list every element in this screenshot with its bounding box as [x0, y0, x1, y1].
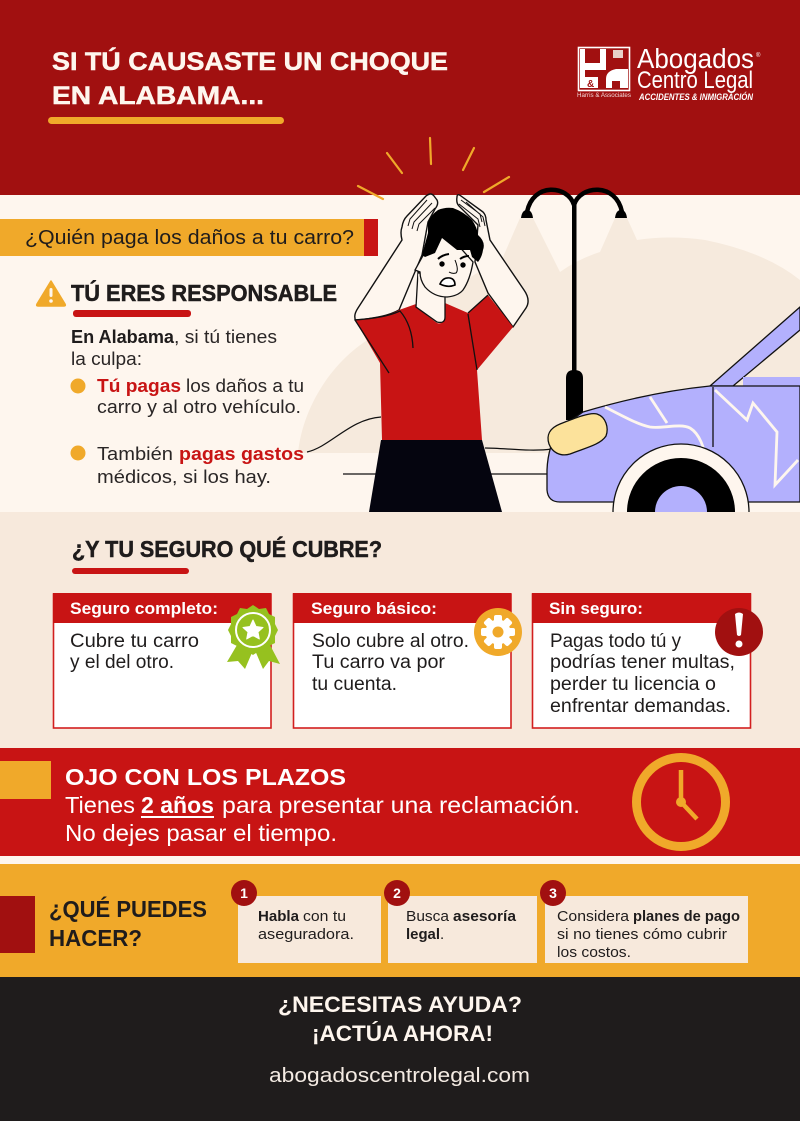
icon: gear	[474, 608, 522, 656]
deadline text: 2 años	[141, 792, 214, 818]
bullet one: los daños a tu	[186, 376, 304, 396]
responsibility text: En Alabama	[71, 327, 175, 347]
pants	[369, 440, 502, 512]
card: sin seguro: Pagas todo tú y	[550, 631, 681, 652]
step two: 2	[393, 885, 401, 901]
deadline text: No dejes pasar el tiempo.	[65, 820, 337, 846]
responsibility text: , si tú tienes	[174, 327, 277, 347]
step three: 3	[549, 885, 557, 901]
title: SI TÚ CAUSASTE UN CHOQUE	[52, 46, 448, 76]
head	[415, 225, 473, 297]
card: sin seguro: perder tu licencia o	[550, 674, 716, 695]
card: seguro completo: Cubre tu carro	[70, 631, 199, 652]
headlight	[548, 414, 607, 455]
ground line and wires	[307, 417, 552, 474]
call to action: ¿NECESITAS AYUDA?	[278, 992, 522, 1017]
bullet two: pagas gastos	[179, 444, 304, 464]
card: seguro basico	[293, 593, 511, 728]
left arm and hand	[355, 194, 438, 320]
car	[547, 307, 800, 580]
step three: los costos.	[557, 944, 631, 961]
heading underline	[73, 310, 191, 317]
step three	[540, 880, 748, 963]
bullet two	[70, 444, 304, 487]
footer	[0, 977, 800, 1121]
icon: warning	[37, 281, 65, 306]
logo mark	[577, 48, 632, 99]
finger lines	[408, 200, 485, 231]
wheel	[613, 444, 749, 580]
question bar	[0, 219, 378, 256]
right arm and hand	[457, 195, 528, 327]
street lamp	[521, 190, 627, 420]
neck	[416, 272, 445, 322]
card: seguro basico: Tu carro va por	[312, 652, 446, 673]
step three: planes de pago	[633, 908, 740, 925]
header band	[0, 0, 800, 195]
title: EN ALABAMA...	[52, 82, 264, 110]
icon: exclamation	[715, 608, 763, 656]
logo: ACCIDENTES & INMIGRACIÓN	[638, 91, 753, 102]
step two: Busca	[406, 908, 450, 925]
bullet one	[70, 376, 304, 417]
bullet two: médicos, si los hay.	[97, 467, 271, 487]
shirt lines	[355, 295, 488, 373]
shirt	[355, 295, 513, 440]
deadline text: para presentar una reclamación.	[222, 792, 580, 818]
logo mark: &	[587, 79, 594, 90]
card: seguro basico: Solo cubre al otro.	[312, 631, 469, 652]
actions heading: HACER?	[49, 925, 142, 951]
background hump and lamp light	[298, 218, 800, 453]
actions band	[0, 856, 800, 977]
bullet two: También	[97, 444, 173, 464]
card: seguro completo: Seguro completo:	[70, 599, 218, 618]
impact rays	[358, 138, 509, 199]
deadline heading: OJO CON LOS PLAZOS	[65, 764, 346, 790]
question bar: ¿Quién paga los daños a tu carro?	[25, 227, 354, 249]
step three: si no tienes cómo cubrir	[557, 926, 727, 943]
step one: aseguradora.	[258, 926, 354, 943]
logo: Centro Legal	[637, 67, 753, 94]
icon: clock	[636, 758, 726, 846]
deadline text: Tienes	[65, 792, 135, 818]
card: sin seguro	[532, 593, 751, 728]
responsibility text	[70, 327, 304, 487]
title	[52, 46, 448, 110]
bullet one: Tú pagas	[97, 376, 181, 396]
step one: 1	[240, 885, 248, 901]
card: seguro completo	[53, 593, 271, 728]
title underline	[48, 117, 284, 124]
call to action: ¡ACTÚA AHORA!	[312, 1021, 493, 1046]
hair	[422, 208, 484, 262]
underline two years	[141, 816, 214, 818]
logo: ®	[756, 52, 761, 59]
actions heading	[49, 895, 207, 951]
logo mark: Harris & Associates	[577, 92, 632, 99]
insurance section	[0, 512, 800, 748]
bullet one: carro y al otro vehículo.	[97, 397, 301, 417]
step two	[384, 880, 537, 963]
card: seguro basico: tu cuenta.	[312, 674, 397, 695]
call to action	[278, 992, 522, 1046]
illustration: man and crashed car	[298, 190, 800, 580]
website: abogadoscentrolegal.com	[269, 1065, 530, 1087]
icon: ribbon	[227, 605, 280, 669]
step two: legal	[406, 926, 440, 943]
card: sin seguro: podrías tener multas,	[550, 652, 735, 673]
logo	[577, 43, 761, 102]
heading: seguro: ¿Y TU SEGURO QUÉ CUBRE?	[72, 535, 382, 562]
man	[355, 194, 528, 512]
card: seguro basico: Seguro básico:	[311, 599, 437, 618]
actions heading: ¿QUÉ PUEDES	[49, 895, 207, 922]
deadline band	[0, 748, 800, 856]
card: sin seguro: enfrentar demandas.	[550, 696, 731, 717]
deadline text	[65, 792, 580, 846]
underline	[72, 568, 189, 574]
face features	[438, 254, 469, 286]
step one: Habla	[258, 908, 300, 925]
card: seguro completo: y el del otro.	[70, 652, 174, 673]
responsibility text: la culpa:	[71, 349, 142, 369]
step two: asesoría	[453, 908, 517, 925]
step three: Considera	[557, 908, 630, 925]
step two: .	[440, 926, 444, 943]
step one	[231, 880, 381, 963]
card: sin seguro: Sin seguro:	[549, 599, 643, 618]
logo: Abogados	[637, 43, 754, 74]
heading: tú eres responsable: TÚ ERES RESPONSABLE	[71, 279, 337, 306]
step one: con tu	[303, 908, 346, 925]
